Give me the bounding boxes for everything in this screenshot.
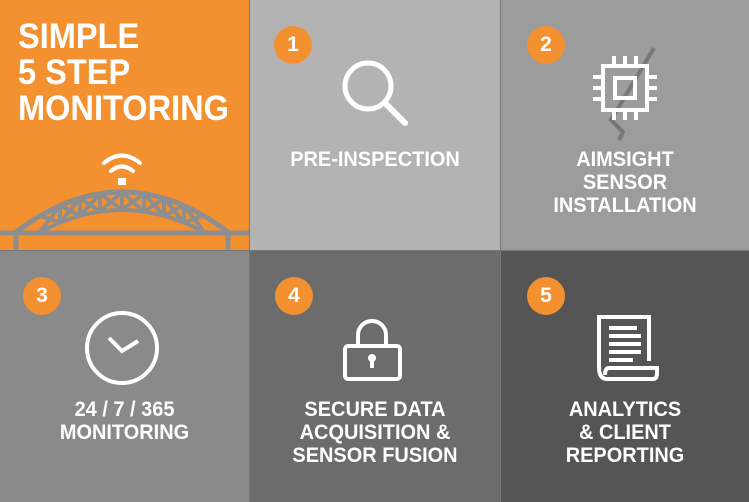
panel: title: [0, 0, 249, 250]
label: ANALYTICS: [569, 398, 681, 421]
icon: sensor chip: [593, 47, 657, 141]
badge 2: 2: [540, 33, 552, 56]
badge 5: 5: [540, 284, 552, 307]
badge 1: [274, 26, 312, 64]
badge 3: 3: [36, 284, 48, 307]
badge 3: [23, 277, 61, 315]
badge 5: [527, 277, 565, 315]
label: PRE-INSPECTION: [290, 148, 460, 171]
label: [292, 398, 458, 467]
label: MONITORING: [60, 421, 189, 444]
icon: report document: [597, 315, 659, 381]
badge 1: 1: [287, 33, 299, 56]
label: & CLIENT: [579, 421, 671, 444]
label: SENSOR FUSION: [292, 444, 458, 467]
label: [553, 148, 697, 217]
icon: bridge with wifi: [0, 153, 249, 250]
label: REPORTING: [566, 444, 684, 467]
panel: step 5: [501, 251, 749, 502]
badge 2: [527, 26, 565, 64]
icon: magnifier: [342, 60, 408, 126]
icon: clock: [85, 311, 159, 385]
badge 4: [275, 277, 313, 315]
panel: step 4: [250, 251, 500, 502]
label: [60, 398, 189, 444]
title: 5 STEP: [18, 53, 130, 92]
label: SENSOR: [583, 171, 667, 194]
title: MONITORING: [18, 89, 229, 128]
label: [566, 398, 684, 467]
title: [18, 17, 229, 128]
panel: step 3: [0, 251, 249, 502]
label: AIMSIGHT: [576, 148, 674, 171]
badge 4: 4: [288, 284, 300, 307]
label: SECURE DATA: [304, 398, 446, 421]
panel: step 2: [501, 0, 749, 250]
label: 24 / 7 / 365: [75, 398, 174, 421]
label: INSTALLATION: [553, 194, 697, 217]
title: SIMPLE: [18, 17, 139, 56]
icon: padlock: [343, 319, 402, 381]
label: ACQUISITION &: [300, 421, 450, 444]
panel: step 1: [250, 0, 500, 250]
